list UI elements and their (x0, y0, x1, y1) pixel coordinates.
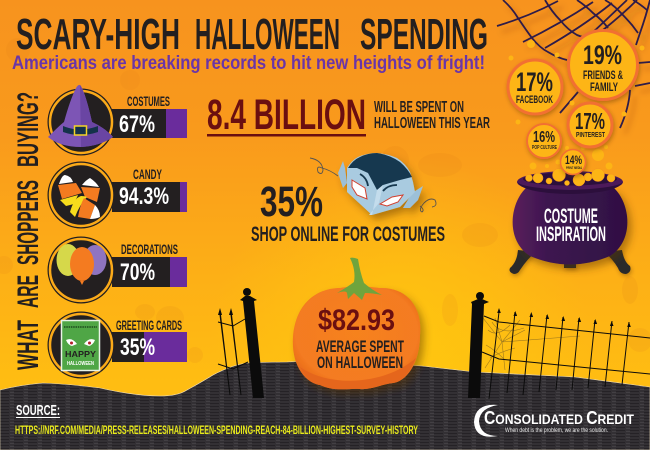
icon: balloons (48, 236, 114, 304)
cauldron label (536, 205, 606, 246)
side heading: WHAT (12, 320, 45, 370)
bubbles: small decorative drops (508, 40, 644, 170)
icon: crescent (474, 405, 498, 437)
bar: costumes 67%: 67% (119, 111, 155, 138)
title: SPENDING (360, 10, 488, 59)
label: greeting cards: GREETING CARDS (116, 318, 182, 333)
bubble: friends and family (568, 30, 638, 100)
side heading: BUYING? (12, 92, 45, 167)
pumpkin (293, 258, 420, 389)
title: SCARY-HIGH (16, 10, 180, 59)
ground (0, 360, 650, 450)
icon: witch hat (48, 85, 114, 156)
title (16, 10, 488, 59)
bubble: friends and family: FRIENDS & (583, 68, 623, 82)
bubble: pop culture (527, 124, 561, 158)
bubble: facebook (508, 60, 562, 114)
caption: will be spent: WILL BE SPENT ON (374, 99, 464, 116)
panel: costumes (48, 85, 187, 156)
bubble: friends and family: FAMILY (590, 80, 618, 94)
stat: 35% online (251, 178, 445, 246)
bubble: friends and family: 19% (583, 40, 622, 70)
bubble: pinterest (568, 103, 612, 147)
source (15, 402, 418, 437)
side heading: SHOPPERS (12, 180, 45, 265)
bar: candy 94.3%: 94.3% (119, 183, 169, 210)
right fence (468, 292, 650, 399)
bubble: pop culture: POP CULTURE (532, 145, 557, 151)
icon: brew bubbles (526, 168, 615, 186)
subtitle: Americans are breaking records to hit new heights of fright! (12, 53, 485, 74)
icon: cauldron rim (517, 171, 623, 194)
bubble: print media (560, 150, 586, 174)
icon: pumpkin stem (337, 258, 382, 300)
source: SOURCE: (16, 402, 60, 419)
icon: cauldron body (513, 188, 627, 264)
icon: greeting card: HALLOWEEN (67, 361, 94, 367)
stat: 8.4 billion: 8.4 BILLION (207, 91, 366, 139)
bubble: print media: PRINT MEDIA (566, 166, 582, 170)
amount: $82.93 (318, 304, 395, 337)
icon: greeting card (48, 312, 114, 378)
tagline: When debt is the problem, we are the solution. (505, 427, 608, 434)
side heading: ARE (12, 275, 45, 308)
icon: candy corn (48, 162, 114, 228)
label: candy: CANDY (133, 167, 162, 182)
icon: vampire mask (310, 153, 436, 215)
cobweb on fence (483, 318, 580, 370)
caption: shop online: SHOP ONLINE FOR COSTUMES (251, 223, 445, 246)
caption: will be spent (374, 99, 490, 132)
panel: decorations (48, 236, 187, 304)
logo: consolidated credit (474, 405, 634, 437)
bubble: pinterest: 17% (575, 108, 605, 134)
icon: cauldron legs (510, 250, 630, 274)
bubble: facebook: FACEBOOK (516, 94, 553, 106)
bar: greeting cards 35%: 35% (120, 334, 155, 361)
label: decorations: DECORATIONS (121, 242, 178, 257)
caption: average spent: ON HALLOWEEN (317, 353, 403, 372)
bubble: facebook: 17% (516, 67, 553, 97)
caption: will be spent: HALLOWEEN THIS YEAR (374, 115, 490, 132)
cauldron label: COSTUME (544, 205, 598, 228)
left fence (218, 288, 264, 398)
bubble: pop culture: 16% (533, 129, 555, 146)
panel: candy (48, 162, 187, 228)
title: HALLOWEEN (195, 10, 340, 59)
label: costumes: COSTUMES (127, 94, 170, 109)
bubble: print media: 14% (565, 153, 582, 167)
icon: greeting card: HAPPY (65, 349, 96, 359)
stat: 35% online: 35% (260, 178, 323, 226)
panel: greeting cards (48, 312, 187, 378)
side heading (12, 92, 45, 370)
cauldron (510, 168, 630, 274)
bubble: pinterest: PINTEREST (576, 130, 605, 139)
spider web (497, 0, 650, 128)
caption: average spent (316, 337, 404, 372)
caption: average spent: AVERAGE SPENT (316, 337, 404, 356)
wordmark: CONSOLIDATED CREDIT (484, 408, 634, 428)
bar: decorations 70%: 70% (120, 259, 155, 286)
